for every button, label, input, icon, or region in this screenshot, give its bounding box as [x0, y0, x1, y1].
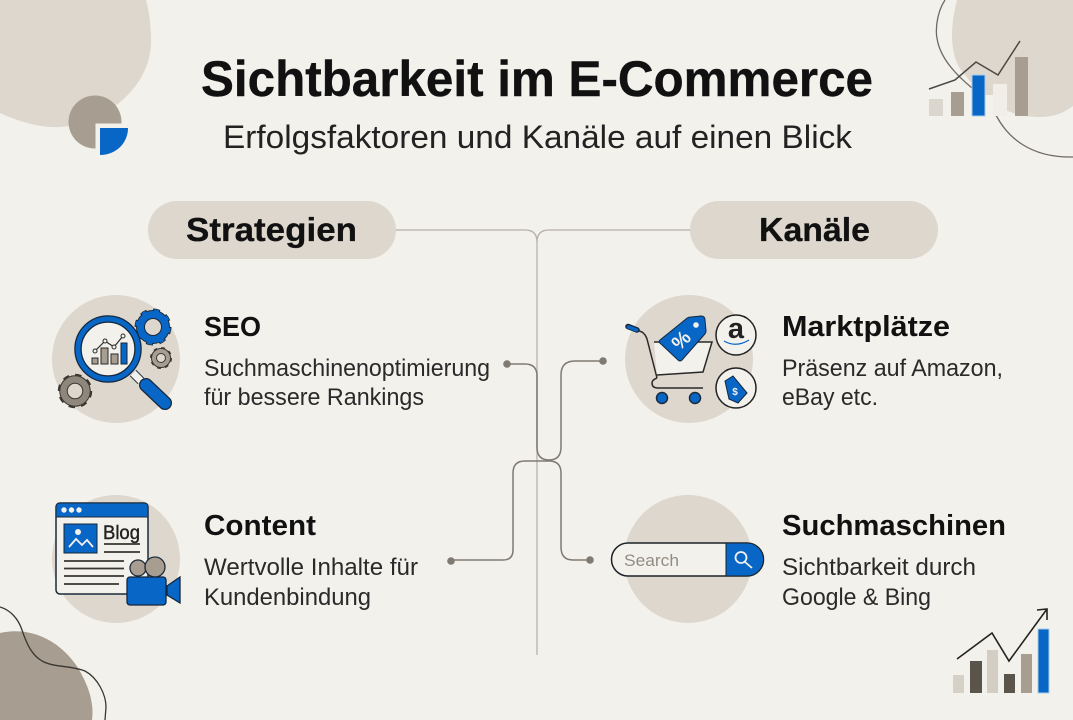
video camera [127, 557, 180, 605]
icon: magnifier lens [78, 319, 138, 379]
text block: Content [204, 510, 418, 611]
amazon badge: a [728, 313, 745, 345]
text block: Marktplätze [782, 311, 1003, 411]
connector lines [396, 230, 690, 655]
icon: grey gear [60, 376, 90, 406]
dollar tag badge: $ [732, 387, 738, 398]
title: Sichtbarkeit im E-Commerce [201, 51, 873, 107]
text block: Content: Content [204, 510, 316, 542]
icon: SEO magnifier with gears [52, 295, 180, 423]
text block: SEO: SEO [204, 311, 261, 342]
blog label: Blog [103, 523, 140, 544]
image placeholder [64, 524, 97, 553]
price tag: % [668, 326, 696, 355]
icon: blog page with video camera [52, 495, 180, 623]
cart [628, 326, 712, 404]
icon: large blue gear [137, 311, 169, 343]
text lines [64, 544, 140, 584]
text block: Marktplätze: eBay etc. [782, 384, 878, 411]
text block: Content: Wertvolle Inhalte für [204, 554, 418, 581]
text block: Suchmaschinen: Google & Bing [782, 584, 931, 611]
subtitle: Erfolgsfaktoren und Kanäle auf einen Blick [223, 119, 853, 155]
icon: mini chart [92, 334, 127, 364]
decoration: top-right blob and bar chart [929, 0, 1073, 157]
browser window [56, 503, 148, 594]
text block: Suchmaschinen: Suchmaschinen [782, 510, 1006, 542]
text block: SEO: Suchmaschinenoptimierung [204, 355, 490, 382]
heading pill: Kanäle [690, 201, 938, 259]
text block: Suchmaschinen [782, 510, 1006, 611]
heading pill: Kanäle: Kanäle [759, 211, 870, 248]
icon: search bar [612, 495, 764, 623]
icon: search bar: Search [624, 551, 679, 570]
icon: shopping cart with badges [625, 295, 756, 423]
decoration: bottom-left blob and curve [0, 607, 106, 720]
heading pill: Strategien [148, 201, 396, 259]
text block: Content: Kundenbindung [204, 584, 371, 611]
heading pill: Strategien: Strategien [186, 211, 357, 248]
decoration: top-left blob and logo [0, 0, 151, 160]
icon: magnifier handle [133, 373, 165, 403]
icon: small gear [152, 348, 170, 368]
text block: Marktplätze: Marktplätze [782, 311, 950, 343]
text block: SEO: für bessere Rankings [204, 384, 424, 411]
decoration: bottom-right growth chart [953, 609, 1049, 693]
text block: Suchmaschinen: Sichtbarkeit durch [782, 554, 976, 581]
text block: Marktplätze: Präsenz auf Amazon, [782, 355, 1003, 382]
text block: SEO [204, 311, 490, 411]
